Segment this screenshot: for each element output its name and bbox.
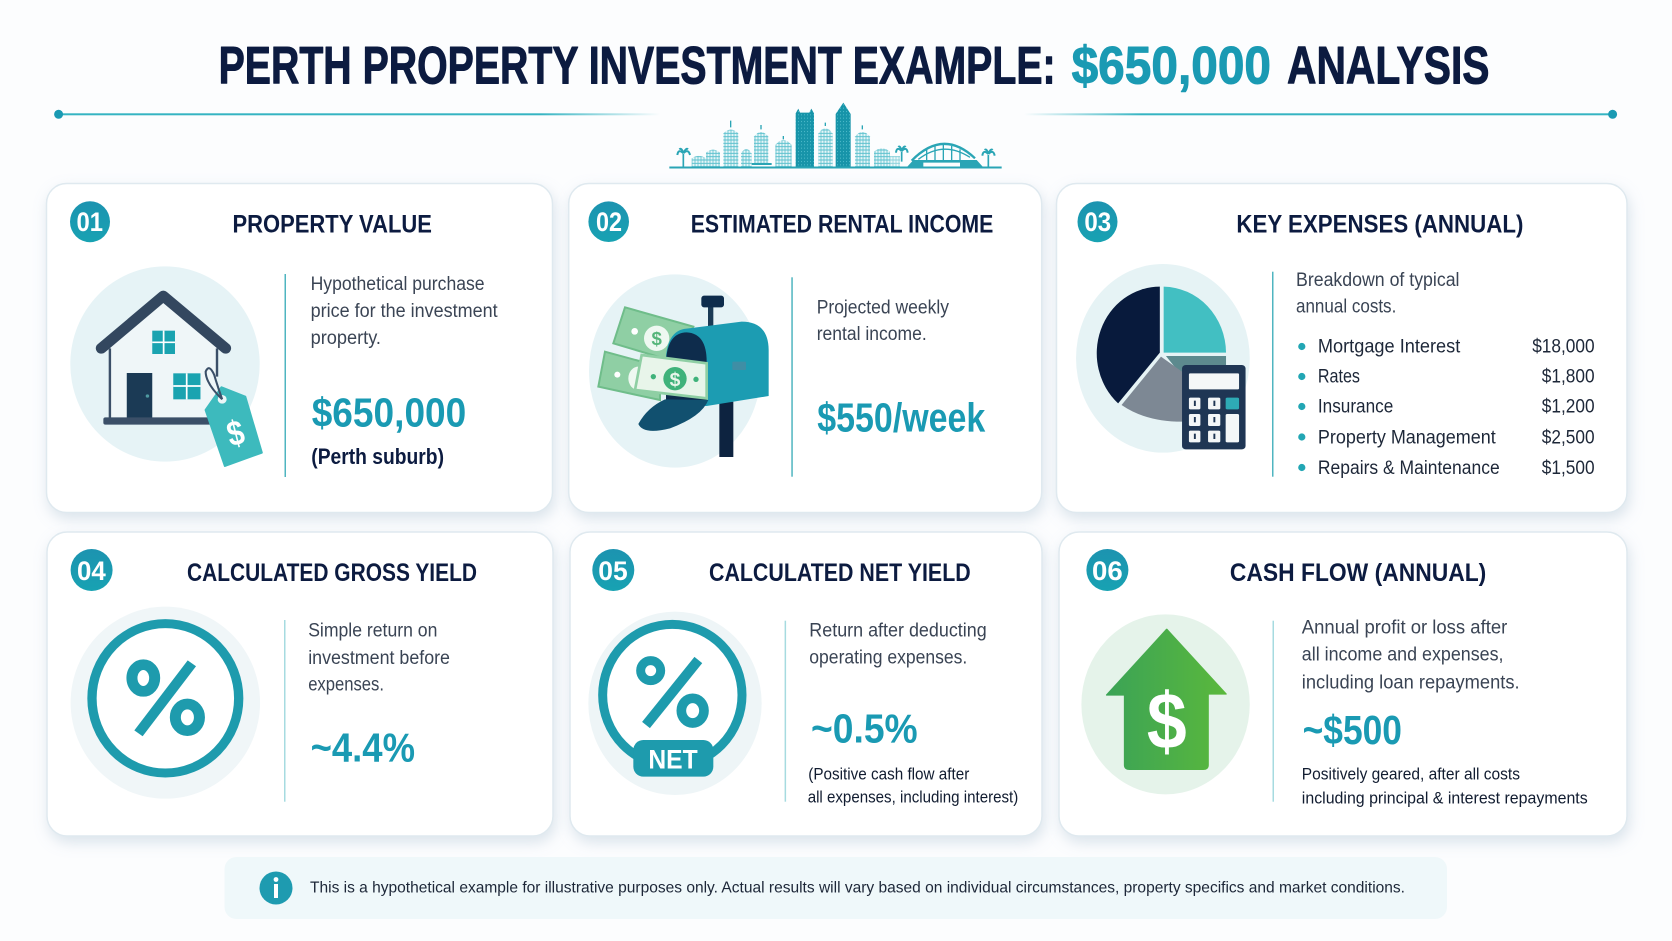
panel: cash flow bbox=[1059, 532, 1627, 836]
panel: calculated net yield bbox=[570, 532, 1042, 836]
panel: estimated rental income bbox=[569, 184, 1042, 512]
description: rental income. bbox=[817, 324, 927, 345]
description: Simple return on bbox=[308, 621, 437, 642]
description bbox=[308, 621, 450, 696]
icon: mailbox with cash: $ bbox=[670, 370, 681, 391]
disclaimer text: This is a hypothetical example for illustrative purposes only. Actual results will vary based on individual circumstances, property specifics and market conditions. bbox=[310, 880, 1405, 897]
badge 01 bbox=[70, 201, 110, 242]
icon: info bbox=[260, 872, 292, 904]
description: Breakdown of typical bbox=[1296, 270, 1460, 291]
badge 02: 02 bbox=[596, 207, 622, 237]
value: ~$500 bbox=[1303, 707, 1402, 753]
icon: house with price tag: $ bbox=[223, 412, 249, 454]
heading: CASH FLOW (ANNUAL) bbox=[1230, 559, 1486, 587]
description: all income and expenses, bbox=[1302, 645, 1504, 666]
icon: net percent ring bbox=[588, 612, 762, 795]
note bbox=[1302, 765, 1588, 807]
icon: net percent ring: NET bbox=[648, 744, 698, 774]
badge 06 bbox=[1086, 549, 1128, 591]
icon: mailbox with cash bbox=[589, 274, 769, 468]
expense list: Insurance bbox=[1318, 397, 1393, 418]
badge 03 bbox=[1078, 201, 1118, 242]
description bbox=[1302, 617, 1520, 693]
description: including loan repayments. bbox=[1302, 672, 1520, 693]
value: ~4.4% bbox=[311, 725, 415, 771]
badge 05: 05 bbox=[598, 556, 628, 586]
heading: CALCULATED GROSS YIELD bbox=[187, 559, 477, 587]
description bbox=[311, 274, 498, 349]
expense list: Rates bbox=[1318, 367, 1360, 388]
value: $650,000 bbox=[312, 390, 466, 436]
expense list bbox=[1298, 337, 1595, 479]
badge 05 bbox=[592, 549, 634, 591]
expense list: $1,500 bbox=[1542, 458, 1595, 479]
badge 01: 01 bbox=[76, 207, 103, 237]
badge 02 bbox=[588, 201, 629, 242]
note bbox=[808, 765, 1018, 807]
expense list: $18,000 bbox=[1532, 337, 1595, 358]
value: $550/week bbox=[817, 395, 985, 441]
panel: property value bbox=[46, 184, 552, 512]
description: property. bbox=[311, 328, 381, 349]
expense list: $1,200 bbox=[1542, 397, 1595, 418]
icon: pie chart and calculator bbox=[1076, 264, 1250, 453]
title: PERTH PROPERTY INVESTMENT EXAMPLE: bbox=[219, 36, 1056, 96]
heading: KEY EXPENSES (ANNUAL) bbox=[1236, 211, 1523, 239]
description bbox=[809, 621, 987, 668]
description bbox=[1296, 270, 1460, 318]
description: expenses. bbox=[308, 675, 384, 696]
expense list: Repairs & Maintenance bbox=[1318, 458, 1500, 479]
heading: PROPERTY VALUE bbox=[232, 211, 432, 239]
icon: percent ring bbox=[71, 607, 260, 799]
heading: ESTIMATED RENTAL INCOME bbox=[691, 211, 993, 239]
icon: Perth skyline bbox=[669, 103, 1002, 168]
description: Hypothetical purchase bbox=[311, 274, 485, 295]
panel: calculated gross yield bbox=[47, 532, 553, 836]
note: (Perth suburb) bbox=[311, 444, 444, 469]
badge 03: 03 bbox=[1084, 207, 1111, 237]
note: Positively geared, after all costs bbox=[1302, 765, 1520, 783]
description: price for the investment bbox=[311, 301, 498, 322]
note: (Positive cash flow after bbox=[808, 765, 970, 783]
badge 04: 04 bbox=[77, 556, 106, 586]
title: $650,000 bbox=[1072, 36, 1271, 96]
description: Annual profit or loss after bbox=[1302, 617, 1508, 638]
disclaimer callout bbox=[224, 857, 1447, 919]
icon: green up arrow with dollar: $ bbox=[1147, 677, 1187, 766]
description: operating expenses. bbox=[809, 647, 967, 668]
panel: key expenses bbox=[1056, 184, 1627, 512]
value: ~0.5% bbox=[811, 706, 918, 752]
expense list: Property Management bbox=[1318, 427, 1496, 448]
heading: CALCULATED NET YIELD bbox=[709, 559, 971, 587]
title: ANALYSIS bbox=[1287, 36, 1490, 96]
badge 06: 06 bbox=[1092, 556, 1123, 586]
badge 04 bbox=[71, 549, 113, 591]
icon: green up arrow with dollar bbox=[1081, 614, 1250, 794]
description: investment before bbox=[308, 648, 450, 669]
note: all expenses, including interest) bbox=[808, 789, 1018, 807]
expense list: $1,800 bbox=[1542, 367, 1595, 388]
note: including principal & interest repayments bbox=[1302, 789, 1588, 807]
expense list: Mortgage Interest bbox=[1318, 337, 1461, 358]
description bbox=[817, 297, 949, 345]
description: annual costs. bbox=[1296, 297, 1396, 318]
icon: mailbox with cash: $ bbox=[651, 328, 662, 349]
description: Return after deducting bbox=[809, 621, 987, 642]
description: Projected weekly bbox=[817, 297, 949, 318]
icon: house with price tag bbox=[70, 266, 262, 466]
expense list: $2,500 bbox=[1542, 427, 1595, 448]
